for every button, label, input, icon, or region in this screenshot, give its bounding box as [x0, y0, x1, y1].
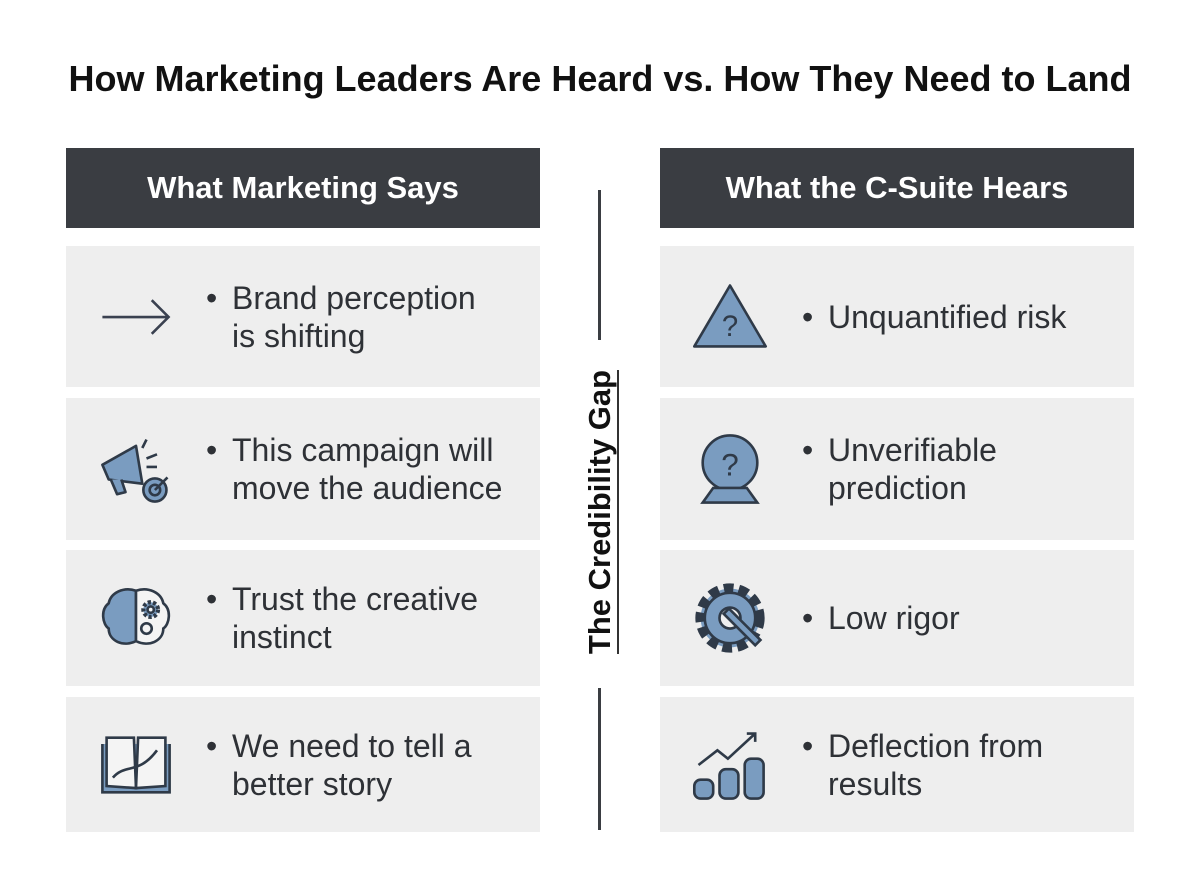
text — [232, 580, 478, 656]
text: Unverifiable — [828, 432, 997, 468]
icon: warning triangle: ? — [722, 309, 738, 342]
title: How Marketing Leaders Are Heard vs. How They Need to Land — [69, 58, 1131, 99]
text: Low rigor — [828, 600, 960, 636]
row R2 — [660, 398, 1134, 540]
text: Unquantified risk — [828, 298, 1066, 334]
text: move the audience — [232, 470, 502, 506]
row R4 — [660, 697, 1134, 832]
text — [232, 726, 472, 802]
header: what marketing says — [66, 148, 540, 228]
icon: warning triangle — [693, 284, 768, 348]
header: what the C-suite hears — [660, 148, 1134, 228]
row R3 — [660, 550, 1134, 686]
text: Trust the creative — [232, 581, 478, 617]
text: We need to tell a — [232, 728, 472, 764]
text: Brand perception — [232, 280, 476, 316]
header: what marketing says: What Marketing Says — [147, 170, 459, 205]
icon: brain with gears — [102, 588, 170, 645]
text: Deflection from — [828, 728, 1043, 764]
text: instinct — [232, 619, 332, 655]
row L3 — [66, 550, 540, 686]
header: what the C-suite hears: What the C-Suite Hears — [726, 170, 1068, 205]
icon: crystal ball — [700, 434, 760, 504]
text: results — [828, 766, 922, 802]
icon: arrow — [102, 299, 170, 335]
icon: megaphone — [101, 439, 168, 503]
icon: crystal ball: ? — [721, 446, 739, 482]
vertical label: The Credibility Gap — [582, 370, 617, 654]
row L2 — [66, 398, 540, 540]
text: better story — [232, 766, 392, 802]
text: This campaign will — [232, 432, 493, 468]
row R1 — [660, 246, 1134, 387]
row L4 — [66, 697, 540, 832]
text — [828, 431, 997, 507]
icon: gear wrench — [695, 583, 765, 653]
text — [828, 726, 1043, 802]
icon: book — [101, 736, 171, 794]
text: prediction — [828, 470, 967, 506]
text: is shifting — [232, 318, 365, 354]
text — [232, 431, 502, 507]
divider: credibility gap — [582, 190, 619, 830]
text — [232, 278, 476, 354]
icon: coins growth — [693, 732, 765, 800]
row L1 — [66, 246, 540, 387]
